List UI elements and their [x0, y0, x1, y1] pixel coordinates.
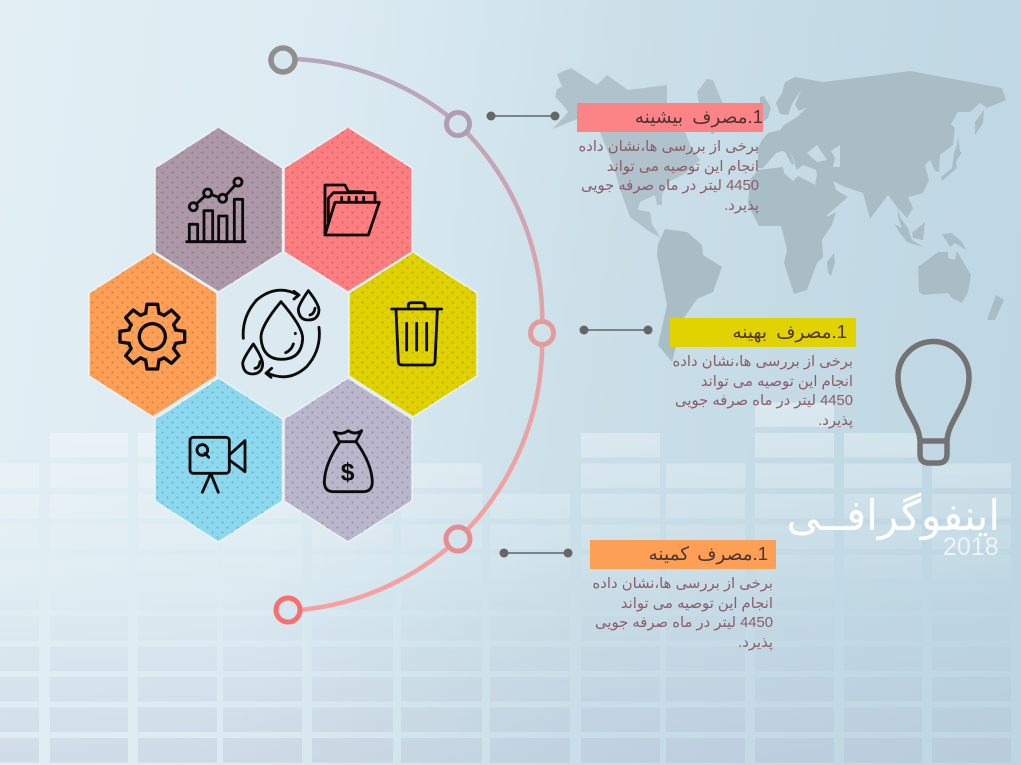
text block: minimum consumption — [593, 576, 773, 651]
timeline node: third — [446, 527, 470, 551]
iceland uk — [760, 96, 771, 122]
greenland — [697, 79, 730, 135]
icon: water cycle — [243, 290, 319, 377]
heading: maximum consumption: 1.مصرف بیشینه — [635, 106, 763, 127]
sakhalin — [975, 110, 984, 135]
connector: third — [500, 548, 572, 558]
icon: money bag — [324, 431, 372, 492]
text block: minimum consumption: انجام این توصیه می تواند — [621, 596, 773, 612]
text block: maximum consumption: 4450 لیتر در ماه صرفه جویی — [581, 178, 759, 194]
icon: chart — [187, 178, 245, 242]
hexagon: camera — [155, 378, 282, 542]
sumatra java — [894, 208, 923, 247]
label panel: minimum consumption — [590, 540, 776, 651]
label panel: optimal consumption — [670, 318, 856, 429]
icons — [120, 178, 442, 492]
africa — [748, 167, 836, 294]
curved timeline arc — [296, 59, 542, 610]
icon: folder — [325, 185, 379, 235]
text block: optimal consumption — [673, 354, 853, 429]
world map — [553, 68, 1006, 362]
heading: maximum consumption — [577, 103, 763, 132]
hexagon: center — [218, 252, 348, 417]
madagascar — [827, 253, 835, 276]
text block: maximum consumption: انجام این توصیه می تواند — [607, 159, 759, 175]
timeline node: end — [276, 598, 300, 622]
hexagon: money — [284, 378, 412, 542]
icon: trash can — [392, 303, 442, 365]
hexagon cluster — [89, 127, 477, 542]
icon: video camera — [190, 437, 245, 492]
text block: maximum consumption: پذیرد. — [724, 198, 759, 214]
icon: gear — [120, 304, 185, 369]
heading: minimum consumption — [590, 540, 776, 569]
text block: optimal consumption: پذیرد. — [818, 413, 853, 429]
text block: optimal consumption: 4450 لیتر در ماه صرفه جویی — [675, 393, 853, 409]
borneo — [912, 222, 925, 240]
title: اینفوگرافــی — [786, 492, 1000, 539]
text block: optimal consumption: برخی از بررسی ها،نشان داده — [673, 354, 853, 370]
new guinea — [942, 233, 966, 250]
japan — [941, 135, 962, 181]
hexagon: chart — [155, 127, 282, 292]
australia — [918, 251, 971, 303]
south america — [657, 229, 722, 362]
heading: optimal consumption: 1.مصرف بهینه — [732, 321, 847, 342]
text block: minimum consumption: برخی از بررسی ها،نشان داده — [593, 576, 773, 592]
label panel: maximum consumption — [577, 103, 763, 214]
new zealand — [987, 295, 1004, 320]
text block: minimum consumption: پذیرد. — [738, 635, 773, 651]
text block: maximum consumption — [579, 139, 759, 214]
text block: minimum consumption: 4450 لیتر در ماه صرفه جویی — [595, 615, 773, 631]
timeline node: first — [446, 112, 470, 136]
text block: maximum consumption: برخی از بررسی ها،نشان داده — [579, 139, 759, 155]
icon: light bulb — [898, 342, 969, 463]
connector: second — [580, 326, 652, 334]
hexagon: gear — [89, 252, 217, 417]
timeline node: start — [271, 48, 295, 72]
hexagon: trash — [349, 252, 477, 417]
north america — [553, 68, 700, 237]
background equalizer bars — [0, 402, 1011, 765]
year: 2018 — [943, 533, 999, 561]
timeline node: second — [530, 322, 554, 344]
heading: minimum consumption: 1.مصرف کمینه — [648, 543, 768, 564]
eurasia — [757, 71, 1006, 219]
heading: optimal consumption — [670, 318, 856, 347]
hexagon: folder — [284, 127, 412, 292]
icon: money bag: $ — [341, 460, 355, 487]
text block: optimal consumption: انجام این توصیه می تواند — [701, 374, 853, 390]
connector: first — [486, 112, 560, 120]
